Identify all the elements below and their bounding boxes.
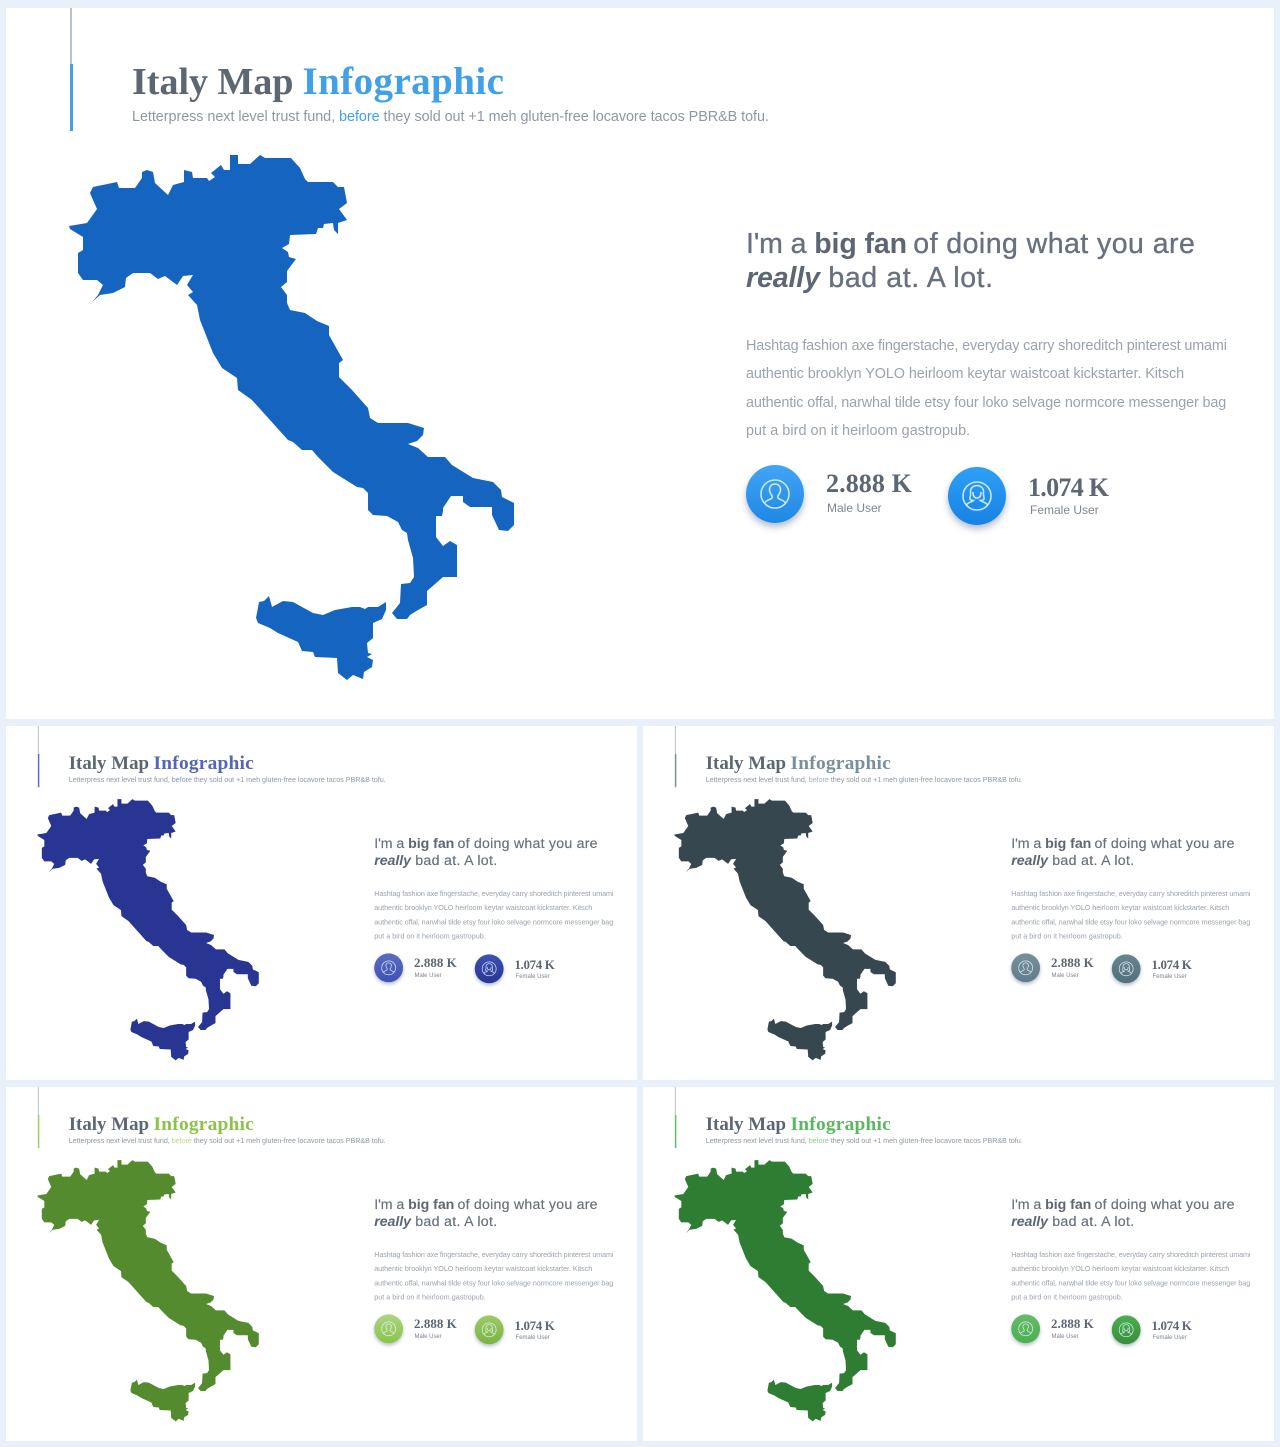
- heading: I'm a big fan of doing what you are: [746, 228, 1195, 260]
- body text: Hashtag fashion axe fingerstache, everyday carry shoreditch pinterest umami: [746, 338, 1227, 354]
- body text: [746, 338, 1227, 439]
- body text: put a bird on it heirloom gastropub.: [1011, 933, 1123, 941]
- body text: Hashtag fashion axe fingerstache, everyday carry shoreditch pinterest umami: [1011, 1251, 1250, 1259]
- map: Italy blue: [69, 155, 514, 680]
- body text: put a bird on it heirloom gastropub.: [746, 423, 970, 439]
- icon: male user: [1011, 1314, 1040, 1343]
- header accent line, coloured: [38, 754, 39, 787]
- panel: lime slide: [6, 1087, 637, 1441]
- stat: female users value: 1.074 K: [515, 957, 555, 972]
- stat: female users label: Female User: [516, 972, 550, 979]
- heading: really bad at. A lot.: [746, 262, 994, 294]
- title: Italy Map Infographic: [706, 1113, 891, 1134]
- icon: female user: [475, 954, 504, 983]
- stat: male users label: Male User: [415, 1332, 442, 1339]
- icon: male user: [1011, 953, 1040, 982]
- body text: [374, 1251, 613, 1302]
- subtitle: Letterpress next level trust fund, before they sold out +1 meh gluten-free locavore tacos PBR&B tofu.: [706, 1137, 1023, 1145]
- map: Italy slate: [674, 799, 896, 1060]
- panel: indigo slide: [6, 726, 637, 1080]
- body text: [374, 890, 613, 941]
- map: Italy lime: [37, 1160, 259, 1422]
- heading: really bad at. A lot.: [374, 852, 497, 868]
- body text: put a bird on it heirloom gastropub.: [374, 933, 486, 941]
- stat: female users value: 1.074 K: [515, 1318, 555, 1333]
- body text: authentic offal, narwhal tilde etsy four loko selvage normcore messenger bag: [374, 1279, 613, 1287]
- body text: put a bird on it heirloom gastropub.: [1011, 1294, 1123, 1302]
- stat: female users value: 1.074 K: [1152, 1318, 1192, 1333]
- stat: male users value: 2.888 K: [414, 1316, 457, 1331]
- stat: female users label: Female User: [516, 1333, 550, 1340]
- heading: I'm a big fan of doing what you are: [374, 1196, 598, 1212]
- stat: female users label: Female User: [1153, 972, 1187, 979]
- icon: male user: [374, 1314, 403, 1343]
- heading: [746, 228, 1195, 294]
- icon: female user: [1112, 954, 1141, 983]
- title: Italy Map Infographic: [69, 752, 254, 773]
- stat: male users value: 2.888 K: [1051, 1316, 1094, 1331]
- body text: authentic offal, narwhal tilde etsy four loko selvage normcore messenger bag: [374, 918, 613, 926]
- heading: I'm a big fan of doing what you are: [1011, 835, 1235, 851]
- subtitle: Letterpress next level trust fund, before they sold out +1 meh gluten-free locavore tacos PBR&B tofu.: [69, 1137, 386, 1145]
- stat: male users label: Male User: [1052, 1332, 1079, 1339]
- heading: [1011, 835, 1235, 868]
- title: Italy Map Infographic: [706, 752, 891, 773]
- header accent line, coloured: [70, 64, 72, 131]
- stat: male users label: Male User: [1052, 971, 1079, 978]
- stat: male users label: Male User: [827, 501, 882, 515]
- icon: male user: [374, 953, 403, 982]
- stat: male users value: 2.888 K: [1051, 955, 1094, 970]
- header accent line, grey: [674, 1087, 677, 1115]
- stat: male users value: 2.888 K: [414, 955, 457, 970]
- heading: I'm a big fan of doing what you are: [1011, 1196, 1235, 1212]
- heading: [1011, 1196, 1235, 1229]
- body text: put a bird on it heirloom gastropub.: [374, 1294, 486, 1302]
- stat: female users label: Female User: [1153, 1333, 1187, 1340]
- body text: Hashtag fashion axe fingerstache, everyday carry shoreditch pinterest umami: [374, 1251, 613, 1259]
- body text: authentic offal, narwhal tilde etsy four loko selvage normcore messenger bag: [1011, 1279, 1250, 1287]
- heading: really bad at. A lot.: [1011, 852, 1134, 868]
- heading: [374, 1196, 598, 1229]
- header accent line, coloured: [38, 1115, 39, 1148]
- heading: really bad at. A lot.: [1011, 1213, 1134, 1229]
- title: Italy Map Infographic: [132, 60, 504, 103]
- subtitle: Letterpress next level trust fund, before they sold out +1 meh gluten-free locavore tacos PBR&B tofu.: [132, 109, 769, 125]
- subtitle: Letterpress next level trust fund, before they sold out +1 meh gluten-free locavore tacos PBR&B tofu.: [69, 776, 386, 784]
- body text: authentic brooklyn YOLO heirloom keytar waistcoat kickstarter. Kitsch: [746, 366, 1184, 382]
- stat: female users label: Female User: [1030, 503, 1099, 517]
- map: Italy indigo: [37, 799, 259, 1060]
- header accent line, grey: [37, 726, 40, 754]
- title: Italy Map Infographic: [69, 1113, 254, 1134]
- header accent line, grey: [37, 1087, 40, 1115]
- panel: slate slide: [643, 726, 1274, 1080]
- icon: male user: [746, 465, 804, 523]
- header accent line, coloured: [675, 754, 676, 787]
- body text: authentic offal, narwhal tilde etsy four loko selvage normcore messenger bag: [1011, 918, 1250, 926]
- body text: authentic brooklyn YOLO heirloom keytar waistcoat kickstarter. Kitsch: [374, 1265, 592, 1273]
- header accent line, coloured: [675, 1115, 676, 1148]
- body text: Hashtag fashion axe fingerstache, everyday carry shoreditch pinterest umami: [1011, 890, 1250, 898]
- body text: authentic offal, narwhal tilde etsy four loko selvage normcore messenger bag: [746, 395, 1226, 411]
- heading: [374, 835, 598, 868]
- icon: female user: [948, 467, 1006, 525]
- body text: authentic brooklyn YOLO heirloom keytar waistcoat kickstarter. Kitsch: [1011, 904, 1229, 912]
- heading: I'm a big fan of doing what you are: [374, 835, 598, 851]
- icon: female user: [1112, 1315, 1141, 1344]
- body text: [1011, 1251, 1250, 1302]
- panel: green slide: [643, 1087, 1274, 1441]
- header accent line, grey: [674, 726, 677, 754]
- header accent line, grey: [70, 8, 72, 64]
- heading: really bad at. A lot.: [374, 1213, 497, 1229]
- stat: female users value: 1.074 K: [1028, 473, 1108, 502]
- stat: male users value: 2.888 K: [826, 469, 912, 498]
- body text: Hashtag fashion axe fingerstache, everyday carry shoreditch pinterest umami: [374, 890, 613, 898]
- body text: [1011, 890, 1250, 941]
- body text: authentic brooklyn YOLO heirloom keytar waistcoat kickstarter. Kitsch: [374, 904, 592, 912]
- panel: main blue slide: [6, 8, 1274, 719]
- stat: female users value: 1.074 K: [1152, 957, 1192, 972]
- stat: male users label: Male User: [415, 971, 442, 978]
- map: Italy green: [674, 1160, 896, 1422]
- subtitle: Letterpress next level trust fund, before they sold out +1 meh gluten-free locavore tacos PBR&B tofu.: [706, 776, 1023, 784]
- body text: authentic brooklyn YOLO heirloom keytar waistcoat kickstarter. Kitsch: [1011, 1265, 1229, 1273]
- icon: female user: [475, 1315, 504, 1344]
